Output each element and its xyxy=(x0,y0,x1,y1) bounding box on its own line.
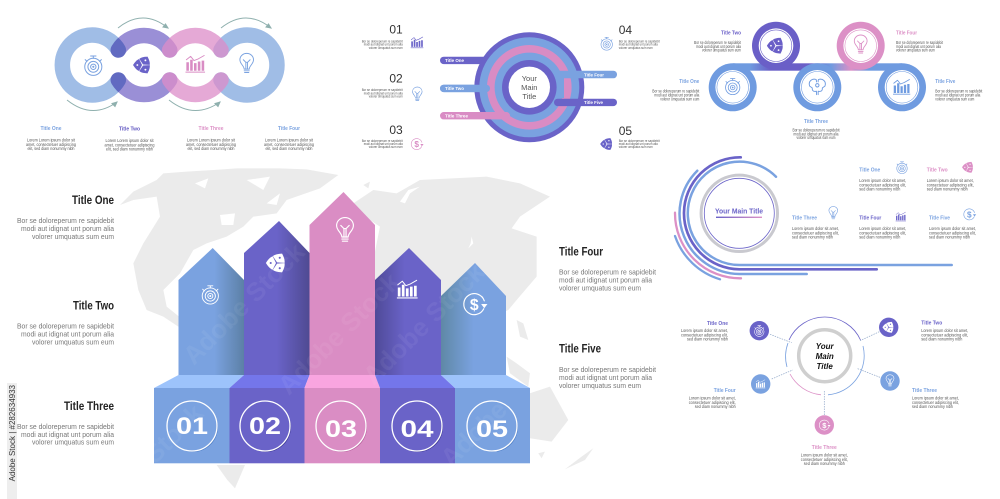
captions: Bor se doloreperum re sapidebit xyxy=(935,88,983,94)
hub title: Your xyxy=(816,342,835,351)
tab labels xyxy=(445,58,604,118)
circle three xyxy=(793,63,841,111)
world map background xyxy=(120,168,593,488)
captions: sed diam nonummy nibh xyxy=(804,461,845,466)
circle two xyxy=(752,22,800,70)
captions: Lorem ipsum dolor sit amet, xyxy=(912,396,959,400)
captions: Title Three xyxy=(912,388,937,394)
node five xyxy=(815,415,834,435)
captions: Title Three xyxy=(812,445,837,451)
captions: Lorem ipsum dolor sit amet, xyxy=(921,328,968,333)
main text: title five xyxy=(559,342,657,390)
captions: sed diam nonummy nibh xyxy=(929,234,971,240)
icon: chart xyxy=(186,56,205,73)
captions: volorer umquatus sum eum xyxy=(896,48,935,52)
captions: modi aut idignat unt porum alia xyxy=(935,92,981,98)
captions: Bor se doloreperum re sapidebit xyxy=(694,40,742,45)
panel: arcs with title xyxy=(675,157,976,279)
title: Your Main Title xyxy=(715,206,763,216)
captions xyxy=(792,168,976,240)
node four xyxy=(751,374,770,394)
captions: Title Two xyxy=(927,168,948,174)
numbers: 05 xyxy=(619,124,632,138)
icon: chart xyxy=(896,212,906,221)
arrow 4 xyxy=(375,248,441,375)
captions: Title Three xyxy=(804,119,828,125)
panel: main arrows chart xyxy=(154,192,530,463)
main text: title four xyxy=(559,244,657,292)
diagonal watermark: Adobe Stock xyxy=(357,256,491,390)
captions: Title Four xyxy=(859,216,882,222)
main text: title three: modi aut idignat unt porum alia xyxy=(21,430,115,439)
arrow 5 xyxy=(441,263,506,375)
item descriptions: modi aut idignat unt porum alia xyxy=(364,91,403,95)
tab labels: Title Five xyxy=(584,100,603,105)
diagonal watermark: Stock xyxy=(138,398,210,469)
main text: title three xyxy=(17,399,115,447)
captions xyxy=(26,126,315,152)
item descriptions: volorer umquatus sum eum xyxy=(369,46,403,50)
node two xyxy=(879,318,898,337)
numbers: 02 xyxy=(389,72,403,86)
numbers: 04 xyxy=(619,23,632,37)
main text: title five: Bor se doloreperum re sapidebit xyxy=(559,365,657,374)
captions: modi aut idignat unt porum alia xyxy=(896,44,942,49)
main text: title three: Title Three xyxy=(64,399,114,413)
captions: Lorem ipsum dolor sit amet, xyxy=(801,452,848,458)
icon: bulb xyxy=(337,218,353,241)
captions: consectetuer adipiscing elit, xyxy=(792,230,839,235)
captions: consectetuer adipiscing elit, xyxy=(801,457,848,462)
main text: title one xyxy=(17,193,115,241)
main text: title four: Title Four xyxy=(559,244,603,258)
panel: five connected circles xyxy=(652,22,983,140)
captions: Title One xyxy=(707,321,728,327)
item descriptions: volorer umquatus sum eum xyxy=(369,94,403,98)
main text: title four: modi aut idignat unt porum alia xyxy=(559,275,653,284)
item descriptions: volorer umquatus sum eum xyxy=(619,46,653,50)
item descriptions: Bor se doloreperum re sapidebit xyxy=(619,139,660,143)
main text: title one: Title One xyxy=(72,193,114,207)
node one xyxy=(750,321,769,340)
icon: stopwatch 04 xyxy=(601,37,612,50)
badge 04: 04 xyxy=(400,416,434,443)
main text: title four: volorer umquatus sum eum xyxy=(559,283,641,292)
captions: Title One xyxy=(859,168,880,174)
item descriptions: volorer umquatus sum eum xyxy=(369,145,403,149)
ring 3 xyxy=(170,36,221,94)
captions: Title Three xyxy=(198,126,224,132)
captions: Lorem Lorem ipsum dolor sit xyxy=(27,138,76,142)
circle one xyxy=(709,63,757,111)
captions: sed diam nonummy nibh xyxy=(927,186,968,192)
captions: elit, sed diam nonummy nibh xyxy=(28,146,75,151)
title underline xyxy=(716,217,762,218)
badge 02: 02 xyxy=(249,413,281,440)
captions: Lorem ipsum dolor sit amet, xyxy=(929,226,976,231)
captions: volorer umquatus sum eum xyxy=(702,48,741,52)
tab labels: Title Four xyxy=(584,72,604,77)
icon: stopwatch xyxy=(85,56,102,75)
badge 03: 03 xyxy=(325,416,357,443)
ring 1 xyxy=(62,35,118,95)
captions: Lorem Lorem ipsum dolor sit xyxy=(265,138,314,142)
captions: amet, consectetuer adipiscing xyxy=(26,142,77,147)
captions: consectetuer adipiscing elit, xyxy=(929,230,976,235)
icon: chart xyxy=(397,280,418,298)
captions: volorer umquatus sum eum xyxy=(660,96,700,102)
captions: Lorem ipsum dolor sit amet, xyxy=(689,396,736,400)
captions: consectetuer adipiscing elit, xyxy=(927,182,974,187)
centre title: Main xyxy=(521,83,537,92)
panel: chained rings xyxy=(26,18,315,152)
centre title: Your xyxy=(522,74,537,83)
main text: title four: Bor se doloreperum re sapidebit xyxy=(559,268,657,276)
concentric rings xyxy=(474,32,584,142)
hub title xyxy=(816,342,835,371)
captions: amet, consectetuer adipiscing xyxy=(104,142,155,148)
captions: Bor se doloreperum re sapidebit xyxy=(792,128,840,132)
item descriptions: Bor se doloreperum re sapidebit xyxy=(619,40,660,44)
tabs over rings xyxy=(440,71,617,119)
captions: Lorem ipsum dolor sit amet, xyxy=(859,226,906,231)
icon: bulb xyxy=(240,53,254,72)
icon: stopwatch xyxy=(202,286,218,304)
captions: Title Four xyxy=(714,388,736,394)
connector bar xyxy=(733,63,902,71)
circle five xyxy=(878,63,926,111)
item descriptions: modi aut idignat unt porum alia xyxy=(619,142,658,146)
captions: volorer umquatus sum eum xyxy=(796,135,836,140)
icon: dollar xyxy=(464,294,487,315)
badge 02 xyxy=(240,401,291,452)
main text: title one: Bor se doloreperum re sapidebit xyxy=(17,216,115,225)
captions: Title Two xyxy=(119,126,141,132)
circle four xyxy=(837,22,885,70)
captions: sed diam nonummy nibh xyxy=(921,336,963,342)
captions: Lorem Lorem ipsum dolor sit xyxy=(187,138,236,142)
main text: title three: Bor se doloreperum re sapidebit xyxy=(17,422,115,431)
node three xyxy=(880,371,900,391)
item descriptions xyxy=(362,40,660,149)
arrow 2 xyxy=(244,221,310,375)
item descriptions: volorer umquatus sum eum xyxy=(619,145,653,149)
badge 05: 05 xyxy=(476,416,508,443)
badge 04 xyxy=(392,401,443,452)
badge 01: 01 xyxy=(176,413,208,440)
icon: dollar 03 xyxy=(411,139,424,150)
captions: consectetuer adipiscing elit, xyxy=(859,182,906,187)
captions: sed diam nonummy nibh xyxy=(792,234,834,240)
captions: Lorem ipsum dolor sit amet, xyxy=(792,226,839,231)
ring 2 xyxy=(118,35,170,95)
captions: sed diam nonummy nibh xyxy=(687,336,729,342)
icon: dollar xyxy=(964,209,976,220)
hub title: Title xyxy=(817,362,833,371)
main text: title two: Bor se doloreperum re sapidebit xyxy=(17,322,115,331)
icon: stopwatch xyxy=(897,162,907,174)
icon: triad xyxy=(133,54,153,76)
captions: Title One xyxy=(679,79,699,85)
captions: Lorem ipsum dolor sit amet, xyxy=(859,178,906,183)
numbers xyxy=(389,22,632,138)
captions: Title One xyxy=(40,126,62,132)
item descriptions: modi aut idignat unt porum alia xyxy=(364,43,403,47)
captions: consectetuer adipiscing elit, xyxy=(689,400,736,405)
hub ring xyxy=(799,330,851,382)
captions: consectetuer adipiscing elit, xyxy=(859,230,906,235)
captions: Lorem ipsum dolor sit amet, xyxy=(927,178,974,183)
captions: consectetuer adipiscing elit, xyxy=(912,400,959,405)
captions: modi aut idignat unt porum alia xyxy=(794,131,839,136)
captions: Lorem Lorem ipsum dolor sit xyxy=(106,138,154,143)
icon: triad xyxy=(266,250,288,276)
main text: title five: volorer umquatus sum eum xyxy=(559,381,641,390)
captions: Title Four xyxy=(896,30,918,36)
main text: title two: Title Two xyxy=(73,298,114,312)
captions: sed diam nonummy nibh xyxy=(695,404,736,409)
centre title xyxy=(521,74,537,101)
captions xyxy=(652,30,983,140)
item descriptions: Bor se doloreperum re sapidebit xyxy=(362,40,403,44)
main text: title five: modi aut idignat unt porum alia xyxy=(559,373,653,382)
badge 03 xyxy=(316,401,367,452)
captions: modi aut idignat unt porum alia xyxy=(654,92,700,98)
top faces xyxy=(154,375,530,388)
captions: volorer umquatus sum eum xyxy=(935,96,975,102)
captions: Bor se doloreperum re sapidebit xyxy=(652,88,700,94)
stock watermark id: Adobe Stock | #282634933 xyxy=(8,384,17,481)
numbers: 01 xyxy=(389,22,403,36)
captions: Title Two xyxy=(921,321,943,327)
orbit arcs xyxy=(786,317,864,395)
badge 01 xyxy=(167,401,218,452)
captions: Title Four xyxy=(278,126,301,132)
main text: title two: modi aut idignat unt porum alia xyxy=(21,330,115,338)
captions: amet, consectetuer adipiscing xyxy=(186,142,237,147)
panel: concentric circle xyxy=(362,22,660,152)
hub title: Main xyxy=(816,352,834,361)
captions: amet, consectetuer adipiscing xyxy=(264,142,315,147)
icon: bulb xyxy=(829,206,838,219)
diagonal watermark xyxy=(138,236,513,473)
captions: sed diam nonummy nibh xyxy=(859,234,901,240)
captions: consectetuer adipiscing elit, xyxy=(681,332,728,337)
main text: title one: volorer umquatus sum eum xyxy=(32,232,114,241)
tab labels: Title Three xyxy=(445,113,468,118)
main text: title one: modi aut idignat unt porum alia xyxy=(21,224,115,233)
panel: hub and spoke xyxy=(681,317,968,466)
title circle xyxy=(701,175,778,252)
flow arrows xyxy=(67,18,271,111)
captions: Lorem ipsum dolor sit amet, xyxy=(681,328,728,333)
icon: triad 05 xyxy=(600,136,614,152)
diagonal watermark: Adobe Stock xyxy=(177,236,311,370)
captions xyxy=(681,321,968,466)
item descriptions: modi aut idignat unt porum alia xyxy=(364,142,403,146)
tabs left xyxy=(440,57,500,92)
icon: chart 01 xyxy=(411,37,423,48)
captions: consectetuer adipiscing elit, xyxy=(921,332,968,337)
front faces xyxy=(154,388,530,463)
captions: sed diam nonummy nibh xyxy=(859,186,901,192)
main text: title two xyxy=(17,298,115,346)
diagonal watermark: Adobe xyxy=(434,394,513,473)
icon: triad xyxy=(962,160,975,175)
main text: title two: volorer umquatus sum eum xyxy=(32,338,114,346)
captions: elit, sed diam nonummy nibh xyxy=(188,146,235,151)
captions: Title Two xyxy=(721,30,742,36)
captions: elit, sed diam nonummy nibh xyxy=(266,146,313,151)
captions: modi aut idignat unt porum alia xyxy=(696,44,742,49)
item descriptions: modi aut idignat unt porum alia xyxy=(619,43,658,47)
icon: bulb 02 xyxy=(412,87,422,100)
captions: elit, sed diam nonummy nibh xyxy=(106,146,154,152)
arrow 1 xyxy=(178,248,244,375)
captions: Bor se doloreperum re sapidebit xyxy=(896,40,944,45)
ring 4 xyxy=(221,35,277,95)
diagonal watermark: Adobe Stock xyxy=(272,266,406,400)
numbers: 03 xyxy=(389,123,403,137)
dashed connectors xyxy=(770,332,880,415)
captions: Title Three xyxy=(792,216,817,222)
main text: title three: volorer umquatus sum eum xyxy=(32,438,114,447)
tab labels: Title Two xyxy=(445,86,464,91)
badge 05 xyxy=(467,401,518,452)
item descriptions: Bor se doloreperum re sapidebit xyxy=(362,139,403,143)
item descriptions: Bor se doloreperum re sapidebit xyxy=(362,88,403,92)
captions: Title Five xyxy=(929,216,950,222)
captions: Title Five xyxy=(935,79,955,85)
tab labels: Title One xyxy=(445,58,464,63)
main text: title five: Title Five xyxy=(559,342,601,356)
captions: sed diam nonummy nibh xyxy=(912,404,954,409)
arrow 3 xyxy=(310,192,375,375)
centre title: Title xyxy=(522,92,536,101)
sweeping arcs xyxy=(675,157,952,279)
